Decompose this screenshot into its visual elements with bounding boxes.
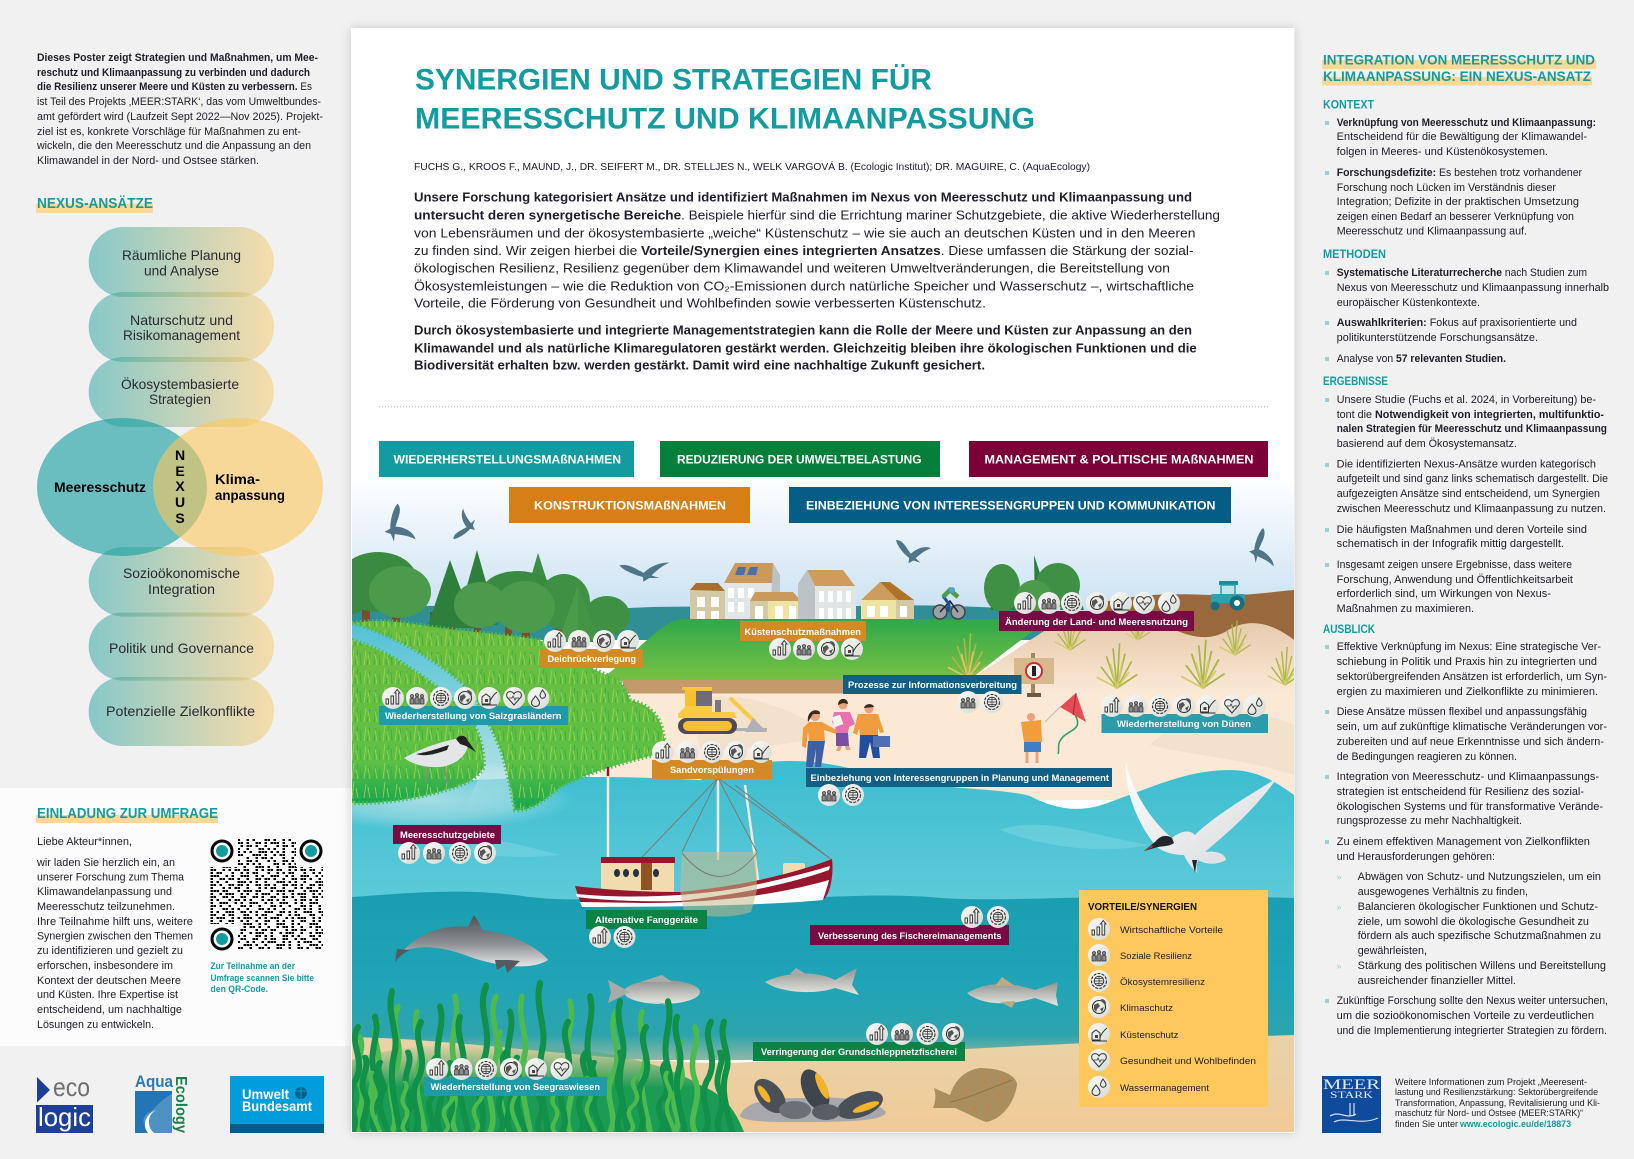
button: Management und politische Maßnahmen [969, 441, 1268, 477]
measure: Deichrückverlegung: Deichrückverlegung [548, 654, 636, 665]
icon: fish group [608, 968, 1058, 1008]
button: Wiederherstellungsmaßnahmen [379, 441, 634, 477]
measure: Meeresschutzgebiete: Meeresschutzgebiete [400, 830, 495, 841]
sand and dunes [600, 615, 1294, 800]
left column: intro text: ist Teil des Projekts ‚MEER:STARK‘, das vom Umweltbundes- [37, 96, 321, 108]
intro paragraph 1: ökologischen Resilienz, Resilienz gegenüber dem Klimawandel und weiteren Umweltveränderungen, die Bereitstellung von [414, 261, 1170, 276]
legend item: Ökosystemresilienz [1088, 970, 1205, 992]
section: Ausblick: und Herausforderungen gehören: [1337, 851, 1495, 863]
section: Ergebnisse: aufgeteilt und sind ganz links schematisch dargestellt. Die [1337, 473, 1608, 485]
project info text: Transformation, Anpassung, Revitalisierung und Kli- [1395, 1098, 1600, 1108]
legend item: Soziale Resilienz: Soziale Resilienz [1120, 951, 1192, 962]
measure: Küstenschutzmaßnahmen [740, 621, 866, 660]
section: Kontext: zeigen einen Bedarf an besserer Verknüpfung von [1337, 211, 1574, 223]
intro paragraph 1 [414, 190, 1220, 311]
section: Methoden: europäischer Küstenkontexte. [1337, 297, 1480, 309]
logo: ecologic [36, 1072, 93, 1133]
left column: intro text: die Resilienz unserer Meere und Küsten zu verbessern. Es [37, 81, 312, 93]
section: Kontext [1323, 99, 1596, 238]
left column: intro text: wickeln, die den Meeresschutz und die Anpassung an den [36, 140, 311, 152]
project info text: lastung und Resilienzstärkung: Sektorübergreifende [1395, 1087, 1598, 1097]
pill: Naturschutz und Risikomanagement: Naturschutz und [130, 312, 233, 328]
venn: NEXUS overlap label: S [175, 510, 185, 526]
panel: centre poster [285, 28, 1302, 1140]
pill: Sozioökonomische Integration: Integration [148, 581, 215, 597]
measure: Wiederherstellung von Dünen [1101, 695, 1268, 733]
section: Methoden: Auswahlkriterien: Fokus auf praxisorientierte und [1337, 317, 1577, 329]
left column: intro text: ziel ist es, konkrete Vorschläge für Maßnahmen zu ent- [37, 126, 301, 138]
icon: flatfish [933, 1068, 1017, 1122]
pill: Sozioökonomische Integration [89, 547, 274, 616]
section: Ergebnisse: aufgezeigten Ansätze sind entscheidend, um Synergien [1337, 488, 1600, 500]
pill: Räumliche Planung und Analyse: Räumliche Planung [122, 247, 241, 263]
section: Ergebnisse: zwischen Meeresschutz und Klimaanpassung zu nutzen. [1337, 503, 1606, 515]
pill: Räumliche Planung und Analyse [89, 227, 274, 297]
left column: intro text: Klimawandel in der Nord- und Ostsee stärken. [37, 155, 259, 167]
heading: Einladung zur Umfrage: EINLADUNG ZUR UMFRAGE [37, 806, 218, 822]
intro paragraph 1: zu finden sind. Wir zeigen hierbei die Vorteile/Synergien eines integrierten Ansatzes . Diese umfassen die Stärkung der sozial- [414, 243, 1194, 258]
measure: Verringerung der Grundschleppnetzfischerei: Verringerung der Grundschleppnetzfischerei [761, 1047, 957, 1058]
heading: Integration von Meeresschutz und Klimaanpassung: INTEGRATION VON MEERESSCHUTZ UND [1323, 51, 1595, 67]
logo: AquaEcology [135, 1073, 189, 1133]
section: Ausblick: gewährleisten, [1358, 945, 1427, 957]
section: Ausblick: zubereiten und auf neue Erkenntnisse und sich ändern- [1337, 736, 1604, 748]
section: Ausblick: AUSBLICK [1323, 624, 1376, 636]
section: Ergebnisse: ERGEBNISSE [1323, 376, 1388, 388]
forest [334, 550, 630, 643]
section: Ausblick: de Bedingungen reagieren zu können. [1337, 751, 1517, 763]
survey body text: unserer Forschung zum Thema [37, 872, 185, 884]
pill: Naturschutz und Risikomanagement [89, 292, 274, 362]
section: Methoden: METHODEN [1323, 249, 1386, 261]
salt marsh with river [352, 621, 668, 815]
section: Ergebnisse: Unsere Studie (Fuchs et al. 2024, in Vorbereitung) be- [1337, 394, 1596, 406]
venn: Klimaanpassung circle: anpassung [215, 487, 285, 503]
pill: Sozioökonomische Integration: Sozioökonomische [123, 565, 240, 581]
section: Ausblick: » [1336, 961, 1342, 971]
icon: dune grass [948, 613, 1302, 688]
button: Konstruktionsmaßnahmen [509, 487, 750, 523]
section: Methoden: politikunterstützende Forschungsansätze. [1337, 332, 1538, 344]
section: Ergebnisse: Insgesamt zeigen unsere Ergebnisse, dass weitere [1337, 559, 1572, 571]
survey body text: Lösungen zu entwickeln. [37, 1019, 154, 1031]
intro paragraph 2: Biodiversität erhalten bzw. werden gestärkt. Damit wird eine nachhaltige Zukunft gesichert. [414, 357, 985, 372]
venn: NEXUS overlap label: X [175, 478, 185, 494]
survey body text [36, 836, 193, 1031]
section: Kontext: folgen in Meeres- und Küstenökosystemen. [1337, 146, 1548, 158]
venn: Meeresschutz circle [37, 418, 207, 556]
pill: Räumliche Planung und Analyse: und Analyse [144, 262, 219, 278]
measure: Prozesse zur Informationsverbreitung [843, 675, 1022, 713]
section: Ausblick: Integration von Meeresschutz- und Klimaanpassungs- [1337, 771, 1599, 783]
left column: intro text: reschutz und Klimaanpassung zu verbinden und dadurch [37, 67, 310, 79]
QR caption: Umfrage scannen Sie bitte [210, 973, 314, 983]
section: Ausblick: ziele, um sowohl die ökologische Gesundheit zu [1358, 916, 1589, 928]
survey body text: erforschen, insbesondere im [37, 960, 173, 972]
icon: stakeholder group [802, 699, 890, 767]
survey body text: Klimawandelanpassung und [37, 886, 172, 898]
QR caption: Zur Teilnahme an der [210, 961, 295, 971]
section: Ergebnisse [1323, 376, 1608, 615]
icon: seagulls in the sky [376, 503, 1276, 584]
intro paragraph 1: von Lebensräumen und der ökosystembasierte „weiche“ Küstenschutz – wie sie auch an deutschen Küsten und in den Meeren [414, 225, 1196, 240]
logo: AquaEcology: Ecology [172, 1076, 189, 1133]
section: Kontext: Entscheidend für die Bewältigung der Klimawandel- [1337, 131, 1587, 143]
measure: Wiederherstellung von Seegraswiesen [424, 1058, 607, 1096]
measure: Verbesserung des Fischereimanagements: Verbesserung des Fischereimanagements [818, 931, 1002, 942]
section: Kontext: Meeresschutz und Klimaanpassung auf. [1337, 226, 1527, 238]
button: Konstruktionsmaßnahmen: KONSTRUKTIONSMAßNAHMEN [534, 500, 726, 512]
venn: Klimaanpassung circle [153, 418, 323, 556]
section: Ausblick: und die Implementierung integrierter Strategien zu fördern. [1337, 1025, 1607, 1037]
panel: survey invitation [0, 788, 351, 1046]
section: Ausblick: sein, um auf zukünftige klimatische Veränderungen vor- [1337, 721, 1607, 733]
sea [285, 761, 1294, 1140]
section: Ausblick: um die sozioökonomischen Vorteile zu verdeutlichen [1337, 1010, 1594, 1022]
measure: Änderung der Land- und Meeresnutzung: Änderung der Land- und Meeresnutzung [1005, 617, 1188, 628]
section: Ausblick: fördern als auch spezifische Schutzmaßnahmen zu [1358, 930, 1601, 942]
logo: AquaEcology: Aqua [135, 1073, 174, 1091]
button: Reduzierung der Umweltbelastung [660, 441, 940, 477]
section: Ausblick: » [1336, 872, 1342, 882]
title: SYNERGIEN UND STRATEGIEN FÜR [415, 63, 932, 96]
measure: Wiederherstellung von Salzgrasländern: Wiederherstellung von Salzgrasländern [385, 711, 562, 722]
pill: Ökosystembasierte Strategien: Ökosystembasierte [121, 375, 239, 392]
legend item: Gesundheit und Wohlbefinden: Gesundheit und Wohlbefinden [1120, 1056, 1256, 1067]
measure: Sandvorspülungen: Sandvorspülungen [670, 765, 754, 776]
section: Kontext: Verknüpfung von Meeresschutz und Klimaanpassung: [1337, 117, 1596, 129]
heading: Integration von Meeresschutz und Klimaanpassung [1322, 51, 1596, 86]
farmland and right-hand trees [984, 555, 1294, 640]
section: Ausblick: » [1336, 902, 1342, 912]
heading: Nexus-Ansätze: NEXUS-ANSÄTZE [37, 195, 153, 212]
legend item: Ökosystemresilienz: Ökosystemresilienz [1120, 977, 1205, 988]
category buttons [379, 441, 1268, 523]
survey body text: wir laden Sie herzlich ein, an [36, 857, 175, 869]
section: Ausblick: Balancieren ökologischer Funktionen und Schutz- [1358, 901, 1598, 913]
section: Ergebnisse: basierend auf dem Ökosystemansatz. [1337, 438, 1517, 450]
section: Kontext: Forschungsdefizite: Es bestehen trotz vorhandener [1337, 167, 1582, 179]
measure: Alternative Fanggeräte [586, 910, 707, 948]
venn: Meeresschutz circle: Meeresschutz [54, 479, 146, 495]
section: Ausblick: strategien ist entscheidend für Resilienz des sozial- [1337, 786, 1584, 798]
diagram: Nexus approaches [37, 227, 323, 746]
pill: Politik und Governance: Politik und Governance [109, 640, 254, 656]
section: Ergebnisse: Die häufigsten Maßnahmen und deren Vorteile sind [1337, 524, 1587, 536]
icon: cyclist [933, 587, 965, 619]
section: Ausblick: ergien zu maximieren und Zielkonflikte zu minimieren. [1337, 686, 1598, 698]
icon: porpoise [395, 915, 548, 973]
logo: MEER:STARK: MEER [1323, 1077, 1380, 1093]
survey body text: Meeresschutz teilzunehmen. [37, 901, 175, 913]
venn: Klimaanpassung circle: Klima- [215, 471, 260, 487]
button: Reduzierung der Umweltbelastung: REDUZIERUNG DER UMWELTBELASTUNG [677, 454, 922, 466]
section: Ergebnisse: Forschung, Anwendung und Öffentlichkeitsarbeit [1337, 574, 1573, 586]
measure: Wiederherstellung von Dünen: Wiederherstellung von Dünen [1117, 719, 1251, 730]
measure: Verringerung der Grundschleppnetzfischerei [753, 1023, 965, 1061]
section: Ergebnisse: schematisch in der Infografik mittig dargestellt. [1337, 538, 1564, 550]
measure: Küstenschutzmaßnahmen: Küstenschutzmaßnahmen [744, 627, 861, 638]
section: Ergebnisse: tont die Notwendigkeit von integrierten, multifunktio- [1337, 409, 1604, 421]
venn: NEXUS overlap label: E [175, 463, 185, 479]
logo: ecologic: eco [53, 1072, 90, 1102]
section: Methoden: Nexus von Meeresschutz und Klimaanpassung innerhalb [1337, 282, 1609, 294]
section: Ergebnisse: Maßnahmen zu maximieren. [1337, 603, 1474, 615]
left column: intro text: Dieses Poster zeigt Strategien und Maßnahmen, um Mee- [37, 52, 318, 64]
button: Einbeziehung von Interessengruppen und Kommunikation: EINBEZIEHUNG VON INTERESSENGRUPPEN UND KOMMUNIKATION [806, 500, 1216, 512]
legend: Vorteile/Synergien [1079, 890, 1268, 1107]
survey body text: zu identifizieren und gezielt zu [37, 945, 183, 957]
logo: Umwelt Bundesamt: Umwelt [242, 1086, 289, 1102]
measure: Wiederherstellung von Salzgrasländern [379, 687, 568, 725]
project info text: www.ecologic.eu/de/18873 [1459, 1119, 1571, 1129]
legend item: Küstenschutz: Küstenschutz [1120, 1030, 1179, 1041]
legend item: Gesundheit und Wohlbefinden [1088, 1049, 1256, 1071]
section: Ausblick: Zu einem effektiven Management von Zielkonflikten [1337, 836, 1590, 848]
icon: bulldozer [678, 687, 767, 734]
left column: intro text: amt gefördert wird (Laufzeit Sept 2022—Nov 2025). Projekt- [37, 111, 323, 123]
QR code [207, 836, 327, 954]
section: Ausblick: Diese Ansätze müssen flexibel und anpassungsfähig [1337, 706, 1587, 718]
measure: Einbeziehung von Interessengruppen: Einbeziehung von Interessengruppen in Planung und Management [810, 773, 1110, 784]
authors: FUCHS G., KROOS F., MAUND, J., DR. SEIFERT M., DR. STELLJES N., WELK VARGOVÁ B. (Ecologic Institut); DR. MAGUIRE, C. (AquaEcology) [414, 160, 1090, 173]
project info text [1395, 1077, 1600, 1129]
survey body text: Synergien zwischen den Themen [37, 930, 193, 942]
button: Einbeziehung von Interessengruppen und Kommunikation [789, 487, 1231, 523]
measure: Änderung der Land- und Meeresnutzung [999, 592, 1194, 631]
legend item: Wirtschaftliche Vorteile: Wirtschaftliche Vorteile [1120, 925, 1223, 936]
legend item: Klimaschutz [1088, 996, 1173, 1018]
pill: Potenzielle Zielkonflikte: Potenzielle Zielkonflikte [106, 703, 255, 719]
logo: ecologic: logic [38, 1102, 91, 1132]
project info text: maschutz für Nord- und Ostsee (MEER:STARK)“ [1395, 1108, 1583, 1118]
survey body text: Ihre Teilnahme hilft uns, weitere [37, 916, 193, 928]
icon: seagrass meadow [351, 984, 744, 1132]
survey body text: entscheidend, um nachhaltige [37, 1004, 182, 1016]
project info text: finden Sie unter [1395, 1119, 1458, 1129]
section: Kontext: Integration; Defizite in der praktischen Umsetzung [1337, 196, 1579, 208]
section: Ausblick: Stärkung des politischen Willens und Bereitstellung [1358, 960, 1606, 972]
intro paragraph 2: Klimawandel und als natürliche Klimaregulatoren gestärkt werden. Gleichzeitig bleiben ihre ökologischen Funktionen und die [414, 340, 1197, 355]
section: Ausblick: Effektive Verknüpfung im Nexus: Eine strategische Ver- [1337, 641, 1601, 653]
icon: tractor [1210, 581, 1245, 610]
section: Ergebnisse: nalen Strategien für Meeresschutz und Klimaanpassung [1337, 423, 1607, 435]
measure: Deichrückverlegung [540, 630, 643, 668]
pill: Ökosystembasierte Strategien [89, 357, 274, 427]
measure: Wiederherstellung von Seegraswiesen: Wiederherstellung von Seegraswiesen [430, 1082, 600, 1093]
logo: Umwelt Bundesamt [230, 1076, 324, 1133]
section: Kontext: Forschung noch Lücken im Verständnis dieser [1337, 182, 1556, 194]
logo: MEER:STARK: STARK [1330, 1090, 1374, 1100]
pill: Politik und Governance [89, 612, 274, 680]
button: Wiederherstellungsmaßnahmen: WIEDERHERSTELLUNGSMAßNAHMEN [394, 454, 621, 466]
scene: coast to sea illustration [352, 498, 1294, 1132]
section: Ausblick: ausgewogenes Verhältnis zu finden, [1358, 886, 1528, 898]
venn: NEXUS overlap label: N [175, 447, 185, 463]
intro paragraph 2: Durch ökosystembasierte und integrierte Managementstrategien kann die Rolle der Meere und Küsten zur Anpassung an den [414, 322, 1192, 337]
measure: Sandvorspülungen [652, 741, 772, 779]
QR caption: den QR-Code. [210, 984, 268, 994]
section: Ergebnisse: erforderlich sind, um Wirkungen von Nexus- [1337, 588, 1551, 600]
pill: Ökosystembasierte Strategien: Strategien [149, 391, 211, 407]
icon: warning sign [1014, 653, 1054, 697]
intro paragraph 1: Vorteile, die Förderung von Gesundheit und Wohlbefinden sowie verbesserten Küstenschutz. [414, 296, 986, 311]
measure: Prozesse zur Informationsverbreitung: Prozesse zur Informationsverbreitung [848, 680, 1017, 691]
measure: Meeresschutzgebiete [393, 825, 501, 864]
intro paragraph 2 [414, 322, 1197, 372]
icon: avocet [404, 736, 476, 785]
intro paragraph 1: untersucht deren synergetische Bereiche . Beispiele hierfür sind die Errichtung mariner Schutzgebiete, die aktive Wiederherstellung [414, 207, 1220, 222]
section: Ausblick: ausreichender finanzieller Mittel. [1358, 975, 1516, 987]
title [415, 63, 1035, 135]
section: Ausblick: schiebung in Politik und Praxis hin zu integrierten und [1337, 656, 1597, 668]
houses [690, 563, 914, 622]
title: MEERESSCHUTZ UND KLIMAANPASSUNG [415, 102, 1035, 135]
survey body text: und Küsten. Ihre Expertise ist [37, 989, 178, 1001]
logo: MEER:STARK [1322, 1076, 1381, 1133]
intro paragraph 1: Ökosystemleistungen – wie die Reduktion von CO₂-Emissionen durch natürliche Speicher und Wasserschutz –, wirtschaftliche [414, 279, 1194, 294]
legend item: Klimaschutz: Klimaschutz [1120, 1003, 1173, 1014]
section: Methoden: Analyse von 57 relevanten Studien. [1337, 353, 1506, 365]
measure: Einbeziehung von Interessengruppen [806, 768, 1112, 806]
heading: Integration von Meeresschutz und Klimaanpassung: KLIMAANPASSUNG: EIN NEXUS-ANSATZ [1323, 68, 1591, 84]
legend: Vorteile/Synergien: VORTEILE/SYNERGIEN [1088, 901, 1197, 913]
section: Ausblick [1323, 624, 1608, 1037]
section: Ausblick: Abwägen von Schutz- und Nutzungszielen, um ein [1358, 871, 1601, 883]
icon: fishing boat [575, 767, 833, 916]
button: Management und politische Maßnahmen: MANAGEMENT & POLITISCHE MAßNAHMEN [984, 454, 1254, 466]
section: Ergebnisse: Die identifizierten Nexus-Ansätze wurden kategorisch [1337, 459, 1596, 471]
intro paragraph 1: Unsere Forschung kategorisiert Ansätze und identifiziert Maßnahmen im Nexus von Meeresschutz und Klimaanpassung und [414, 190, 1192, 205]
survey body text: Kontext der deutschen Meere [37, 975, 181, 987]
right column [1322, 51, 1609, 1133]
legend item: Küstenschutz [1088, 1023, 1179, 1045]
section: Methoden: Systematische Literaturrecherche nach Studien zum [1337, 267, 1587, 279]
section: Ausblick: ökologischen Systems und für transformative Verände- [1337, 801, 1603, 813]
project info text: Weitere Informationen zum Projekt „Meeresent- [1395, 1077, 1587, 1087]
measure: Alternative Fanggeräte: Alternative Fanggeräte [595, 915, 698, 926]
distant hills [352, 605, 1060, 640]
logo: Umwelt Bundesamt: Bundesamt [242, 1098, 312, 1114]
section: Ausblick: sektorübergreifenden Ansätzen ist erforderlich, um Syn- [1337, 671, 1607, 683]
legend item: Wirtschaftliche Vorteile [1088, 918, 1223, 940]
section: Kontext: KONTEXT [1323, 99, 1374, 111]
pill: Naturschutz und Risikomanagement: Risikomanagement [123, 327, 240, 343]
pill: Potenzielle Zielkonflikte [89, 677, 274, 746]
icon: tern [1126, 763, 1277, 873]
sky [352, 498, 1294, 611]
section: Ausblick: rungsprozesse zu mehr Nachhaltigkeit. [1337, 815, 1522, 827]
section: Methoden [1323, 249, 1609, 365]
legend item: Wassermanagement [1088, 1076, 1209, 1098]
legend item: Wassermanagement: Wassermanagement [1120, 1083, 1209, 1094]
venn: NEXUS overlap label: U [175, 494, 185, 510]
left column: intro text [36, 52, 323, 167]
survey body text: Liebe Akteur*innen, [37, 836, 132, 848]
legend item: Soziale Resilienz [1088, 944, 1192, 966]
venn: NEXUS overlap label [175, 447, 185, 526]
section: Ausblick: Zukünftige Forschung sollte den Nexus weiter untersuchen, [1337, 995, 1608, 1007]
measure: Verbesserung des Fischereimanagements [810, 906, 1009, 945]
QR caption [210, 961, 314, 994]
green dike [600, 619, 1050, 681]
icon: kite flyer [1021, 693, 1086, 763]
icon: mussels [740, 1069, 886, 1122]
